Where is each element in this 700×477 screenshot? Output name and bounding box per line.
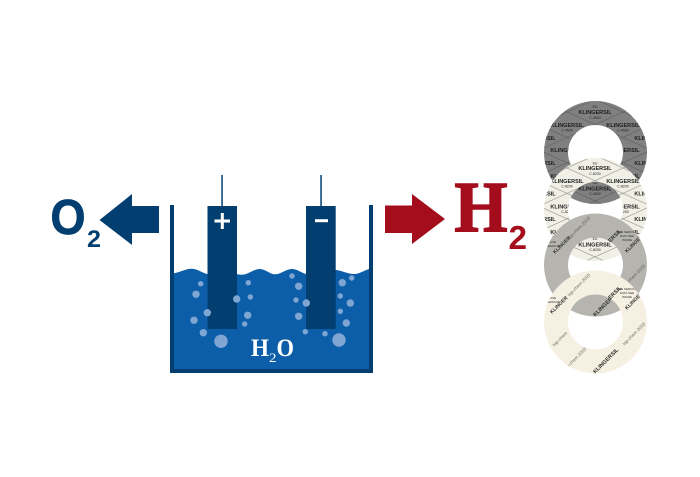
gasket: KLINGERSIL C-4500 grey: EU (593, 105, 598, 109)
gasket: KLINGERSIL C-4500 grey: KLINGERSIL (634, 161, 668, 167)
gasket: KLINGER top-chem grey: USE (550, 240, 556, 244)
anode electrode (208, 175, 237, 329)
gasket: KLINGERSIL C-4500 grey: C-4500 (617, 128, 629, 132)
gasket: KLINGERSIL C-8200 white: KLINGERSIL (578, 166, 612, 172)
gasket: KLINGERSIL C-4500 grey: KLINGERSIL (578, 110, 612, 116)
gasket: KLINGERSIL C-8200 white: KLINGERSIL (550, 230, 584, 236)
gasket: KLINGER top-chem grey: KLINGER (624, 234, 645, 254)
gasket: KLINGERSIL C-8200 white (544, 158, 647, 261)
gasket: KLINGERSIL C-4500 grey: EU (593, 181, 598, 185)
gasket: KLINGER top-chem grey (544, 214, 647, 316)
gasket: KLINGERSIL C-8200 white: KLINGERSIL (606, 204, 640, 210)
gasket stack (544, 101, 647, 374)
gasket: KLINGERSIL C-8200 white: KLINGERSIL (606, 179, 640, 185)
gasket: KLINGER top-chem cream: KLINGER (624, 291, 645, 311)
gasket: KLINGER top-chem grey: top-chem 2003 (567, 215, 592, 240)
label: H2O: 2 (269, 351, 276, 365)
label: O2 oxygen: 2 (87, 226, 101, 253)
arrow: hydrogen leaving to the right (385, 194, 445, 244)
gasket: KLINGER top-chem cream: KLINGER (549, 295, 570, 315)
gasket: KLINGERSIL C-8200 white: KLINGERSIL (606, 230, 640, 236)
gasket: KLINGERSIL C-8200 white: C-8200 (561, 184, 573, 188)
gasket: KLINGER top-chem grey: KLINGERSIL (595, 228, 624, 256)
gasket: KLINGER top-chem grey: top-chem 2003 (622, 263, 647, 288)
gasket: KLINGER top-chem grey: top-chem 2003 (563, 289, 588, 314)
gasket: KLINGERSIL C-4500 grey: KLINGERSIL (522, 161, 556, 167)
gasket: KLINGERSIL C-8200 white: KLINGERSIL (578, 242, 612, 248)
gasket: KLINGER top-chem cream: INSIDE (622, 295, 632, 299)
gasket: KLINGERSIL C-8200 white: KLINGERSIL (634, 192, 668, 198)
label: H2O: H (251, 335, 270, 362)
gasket: KLINGER top-chem cream: top-chem (552, 330, 569, 347)
water (174, 269, 369, 370)
gasket: KLINGERSIL C-4500 grey: KLINGERSIL (550, 123, 584, 129)
gasket: KLINGERSIL C-4500 grey: KLINGERSIL (606, 148, 640, 154)
gasket: KLINGERSIL C-8200 white: C-8200 (617, 210, 629, 214)
gasket: KLINGER top-chem cream: top-chem 2003 (567, 272, 592, 297)
gasket: KLINGER top-chem grey: KLINGERSIL (592, 290, 621, 318)
gasket: KLINGERSIL C-8200 white: EU (593, 162, 598, 166)
bubbles (190, 273, 354, 348)
gasket: KLINGERSIL C-4500 grey: KLINGERSIL (578, 186, 612, 192)
gasket: KLINGERSIL C-8200 white: EU (593, 237, 598, 241)
electrolysis cell (170, 175, 373, 373)
gasket: KLINGER top-chem grey: USE SERVICE (617, 230, 637, 234)
gasket: KLINGERSIL C-8200 white: C-8200 (589, 172, 601, 176)
label: H2O: O (276, 335, 294, 362)
gasket: KLINGERSIL C-8200 white: KLINGERSIL (550, 204, 584, 210)
gasket: KLINGERSIL C-8200 white: KLINGERSIL (634, 217, 668, 223)
gasket: KLINGERSIL C-4500 grey: KLINGERSIL (550, 148, 584, 154)
label: H2 hydrogen: 2 (508, 219, 527, 256)
label: H2 hydrogen: H (454, 168, 508, 248)
cathode electrode (306, 175, 336, 329)
gasket: KLINGER top-chem grey: INSIDE (622, 238, 632, 242)
gasket: KLINGERSIL C-8200 white: KLINGERSIL (522, 192, 556, 198)
gasket: KLINGERSIL C-4500 grey: KLINGERSIL (634, 136, 668, 142)
gasket: KLINGER top-chem cream: USE (550, 296, 556, 300)
gasket: KLINGERSIL C-4500 grey (544, 101, 647, 204)
gasket: KLINGER top-chem cream (544, 270, 647, 374)
gasket: KLINGER top-chem cream: USE SERVICE (617, 287, 637, 291)
label: O2 oxygen: O (50, 191, 86, 245)
gasket: KLINGERSIL C-4500 grey: KLINGERSIL (522, 136, 556, 142)
gasket: KLINGERSIL C-8200 white: KLINGERSIL (522, 217, 556, 223)
gasket: KLINGERSIL C-4500 grey: KLINGERSIL (606, 123, 640, 129)
gasket: KLINGERSIL C-8200 white: C-8200 (561, 210, 573, 214)
gasket: KLINGERSIL C-4500 grey: C-4500 (589, 116, 601, 120)
arrow: oxygen leaving to the left (100, 194, 159, 245)
gasket: KLINGERSIL C-4500 grey: C-4500 (589, 192, 601, 196)
label: O2 oxygen (50, 191, 101, 253)
gasket: KLINGERSIL C-4500 grey: KLINGERSIL (550, 174, 584, 180)
gasket: KLINGER top-chem cream: top-chem 2003 (563, 346, 588, 371)
gasket: KLINGERSIL C-4500 grey: KLINGERSIL (606, 174, 640, 180)
gasket: KLINGER top-chem grey: SERVICE (546, 244, 560, 248)
gasket: KLINGER top-chem grey: KLINGER (552, 235, 573, 255)
beaker walls (170, 205, 373, 373)
gasket: KLINGER top-chem cream: KLINGERSIL (592, 347, 621, 375)
gasket: KLINGER top-chem cream: top-chem 2003 (622, 321, 647, 346)
gasket: KLINGER top-chem cream: SERVICE (546, 300, 560, 304)
label: H2 hydrogen (454, 168, 527, 256)
gasket: KLINGERSIL C-8200 white: C-8200 (589, 248, 601, 252)
gasket: KLINGER top-chem grey: DATA SEE (620, 234, 634, 238)
gasket: KLINGERSIL C-4500 grey: C-4500 (561, 128, 573, 132)
gasket: KLINGERSIL C-8200 white: C-8200 (617, 184, 629, 188)
gasket: KLINGERSIL C-8200 white: KLINGERSIL (550, 179, 584, 185)
gasket: KLINGER top-chem cream: KLINGERSIL (595, 285, 624, 313)
gasket: KLINGER top-chem cream: DATA SEE (620, 291, 634, 295)
label: H2O (251, 335, 294, 365)
